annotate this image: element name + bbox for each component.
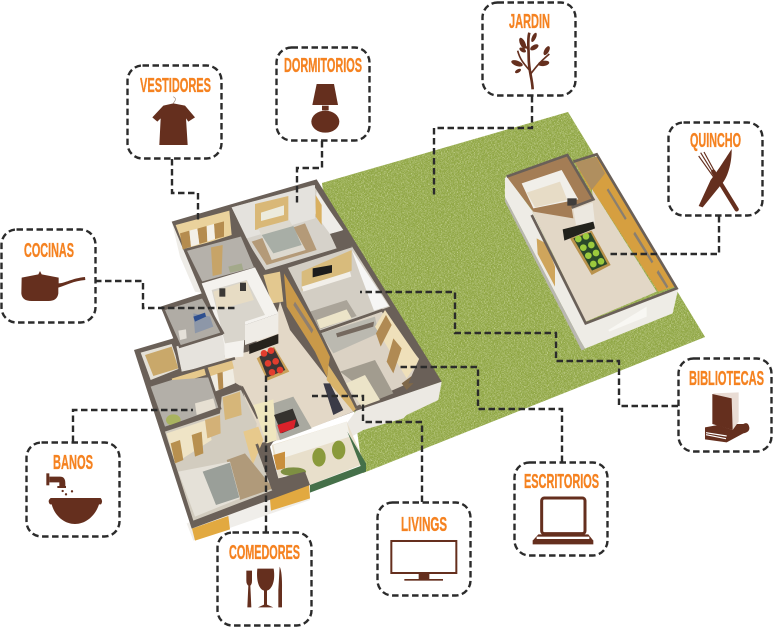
interior partitions (152, 235, 383, 490)
lower bedroom (321, 310, 442, 407)
sofa and coffee table (253, 383, 343, 443)
quincho roof band (507, 155, 593, 218)
storage room (141, 344, 206, 385)
master bedroom bottom (165, 390, 273, 521)
icon: crossed fork and knife (699, 149, 737, 209)
connector: escritorios (398, 367, 562, 462)
panel: dormitorios (276, 48, 370, 140)
master bedroom top (232, 185, 352, 271)
panel: quincho (668, 122, 762, 216)
panel: comedores (218, 532, 312, 626)
heading: comedores: COMEDORES (229, 542, 300, 564)
quincho wall lines (507, 154, 677, 323)
connector: bibliotecas (360, 292, 678, 406)
lower bathroom (151, 377, 221, 427)
icon: cooking pot (21, 271, 85, 301)
icon: table lamp (311, 84, 339, 133)
quincho outbuilding (505, 154, 678, 351)
connector: cocinas (95, 281, 235, 308)
icon: stack of books (705, 392, 749, 442)
connector: dormitorios (297, 141, 322, 205)
dining table (257, 347, 289, 381)
connector: comedores (265, 373, 267, 532)
panel: bibliotecas (678, 358, 772, 452)
quincho right wall (575, 157, 675, 292)
panel: jardin (482, 2, 576, 96)
dressing room (176, 211, 232, 250)
quincho counter and table (563, 222, 611, 275)
panel: banos (26, 442, 120, 536)
living and dining floor (205, 302, 353, 443)
panel: vestidores (128, 66, 222, 158)
icon: fork, wine glass and knife (246, 567, 282, 607)
connector: quincho (608, 216, 719, 254)
connector: vestidores (172, 159, 198, 222)
heading: banos: BANOS (53, 452, 93, 474)
icon: television (391, 541, 456, 581)
exterior walls (172, 222, 442, 541)
structural walls (134, 179, 442, 529)
panel: livings (378, 502, 470, 596)
icon: faucet and basin (46, 473, 102, 524)
quincho floor (532, 188, 657, 322)
garden lawn (322, 112, 705, 473)
heading: vestidores: VESTIDORES (140, 75, 211, 97)
middle bedroom (287, 246, 390, 332)
connector: jardin (434, 96, 532, 196)
bathroom upper (187, 236, 254, 282)
utility room (165, 298, 225, 372)
icon: tree (510, 32, 551, 89)
panel: escritorios (514, 462, 608, 556)
icon: t-shirt on hanger (152, 97, 195, 145)
heading: jardin: JARDIN (509, 11, 550, 33)
balcony (272, 422, 366, 493)
heading: escritorios: ESCRITORIOS (524, 471, 599, 493)
panel: cocinas (2, 230, 96, 322)
heading: dormitorios: DORMITORIOS (284, 55, 362, 77)
apartment floor plan (134, 179, 442, 541)
closet block (207, 359, 235, 392)
connector: livings (312, 396, 422, 502)
kitchen (202, 267, 278, 358)
quincho exterior (505, 176, 678, 351)
quincho kitchen (522, 170, 595, 225)
heading: livings: LIVINGS (401, 514, 447, 536)
hallway wall panel (263, 272, 357, 412)
icon: laptop (533, 498, 593, 544)
heading: cocinas: COCINAS (24, 240, 74, 262)
connector: banos (73, 410, 193, 442)
